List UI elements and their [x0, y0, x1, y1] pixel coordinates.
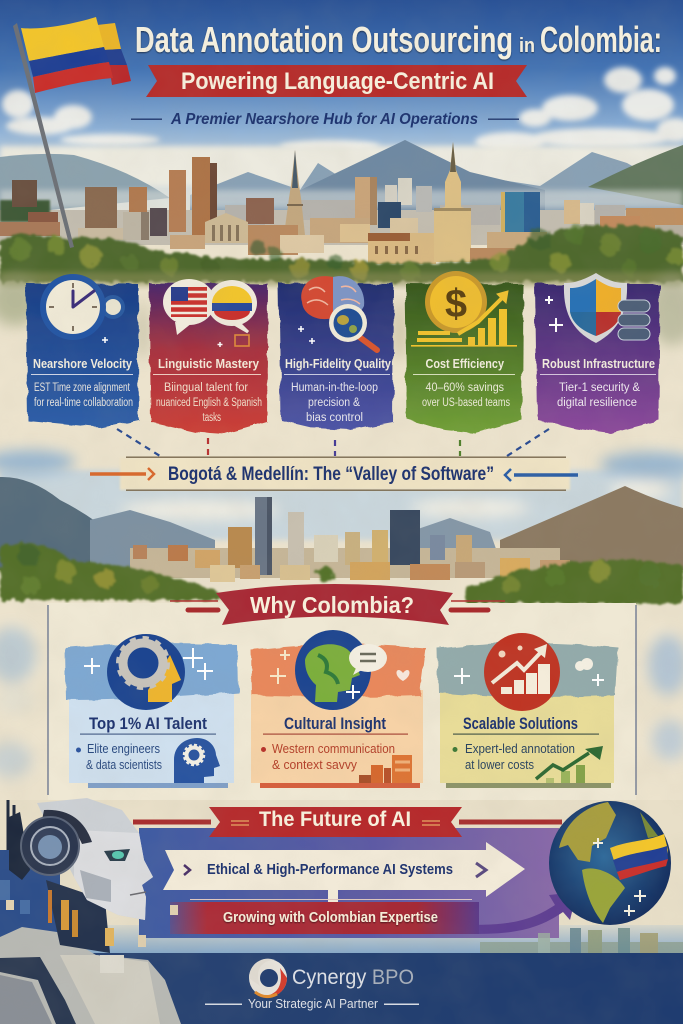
icon: shield and server — [545, 273, 650, 343]
ribbon: The Future of AI: The Future of AI — [259, 808, 411, 831]
arrow: Growing with Colombian Expertise — [170, 892, 577, 934]
head — [37, 798, 153, 920]
body — [0, 927, 181, 1024]
panel: High-Fidelity Quality: precision & — [308, 397, 360, 409]
panel: Robust Infrastructure: digital resilience — [557, 397, 637, 409]
icon: brain and magnifier — [298, 276, 377, 350]
panel: High-Fidelity Quality: Human-in-the-loop — [291, 382, 378, 394]
card: Cultural Insight: Cultural Insight — [284, 714, 386, 733]
icon: speech bubbles with flags — [163, 279, 257, 347]
footer bar — [0, 953, 683, 1024]
ear module — [8, 800, 92, 880]
icon: head with gear — [84, 634, 213, 710]
panel: Linguistic Mastery: tasks — [202, 412, 221, 424]
card: Scalable Solutions: at lower costs — [465, 757, 534, 772]
heading ribbon: Why Colombia?: Why Colombia? — [250, 592, 414, 618]
card: Cultural Insight: Western communication — [272, 741, 395, 756]
header scene: sky, mountains and city — [0, 0, 683, 286]
city buildings — [0, 142, 683, 264]
logo: Cynergy BPO — [205, 959, 419, 1011]
second scene: valley of software skyline — [0, 450, 683, 604]
ribbon: subtitle: Powering Language-Centric AI — [181, 68, 494, 95]
panel: Linguistic Mastery: nuaniced English & Spanish — [156, 397, 262, 409]
tagline: A Premier Nearshore Hub for AI Operations — [170, 111, 478, 128]
panel: Cost Efficiency: over US-based teams — [422, 397, 510, 409]
card: Scalable Solutions: Scalable Solutions — [463, 714, 578, 733]
icon: head with small gear — [174, 738, 220, 783]
card: Top 1% AI Talent: Elite engineers — [87, 741, 160, 756]
card: Top 1% AI Talent: & data scientists — [86, 757, 162, 772]
panel: Linguistic Mastery — [149, 279, 268, 434]
panel: Linguistic Mastery: Linguistic Mastery — [158, 356, 260, 371]
icon: globe with Colombian flag — [549, 801, 671, 925]
icon: logo swirl — [249, 959, 287, 997]
logo: Cynergy BPO: Your Strategic AI Partner — [248, 996, 379, 1011]
icon: coin and growth chart — [411, 271, 517, 347]
icon: clock — [40, 274, 125, 343]
mountains — [0, 140, 683, 215]
panel: Cost Efficiency: 40–60% savings — [426, 382, 504, 394]
arrow: Ethical & High-Performance AI Systems — [163, 842, 525, 902]
icon: growth chart on red circle — [454, 633, 604, 711]
banner: Bogotá & Medellín — [90, 456, 578, 491]
panel: Nearshore Velocity — [26, 274, 139, 428]
panel: Robust Infrastructure: Robust Infrastructure — [542, 356, 655, 371]
panel: Robust Infrastructure: Tier-1 security & — [559, 382, 640, 394]
panel: High-Fidelity Quality: bias control — [306, 412, 363, 424]
arrow: Ethical & High-Performance AI Systems: Ethical & High-Performance AI Systems — [207, 861, 453, 878]
icon: green rising arrow — [536, 746, 603, 783]
arrow: left orange — [90, 468, 154, 480]
icon: coin and growth chart: $ — [445, 282, 467, 326]
icon: Colombian flag on pole — [13, 17, 131, 248]
arrow: Growing with Colombian Expertise: Growing with Colombian Expertise — [223, 910, 438, 926]
panel: Cost Efficiency — [405, 271, 523, 433]
connectors: dashed lines from cards to banner — [117, 429, 549, 456]
panel: Cost Efficiency: Cost Efficiency — [426, 356, 505, 371]
panel: Linguistic Mastery: Biingual talent for — [164, 382, 248, 394]
panel: Robust Infrastructure — [535, 273, 660, 433]
panel: Nearshore Velocity: for real-time collaboration — [34, 397, 133, 409]
banner: Bogotá & Medellín: Bogotá & Medellín: The “Valley of Software” — [168, 464, 494, 485]
logo: Cynergy BPO: Cynergy BPO — [292, 966, 414, 989]
card: Top 1% AI Talent: Top 1% AI Talent — [89, 714, 207, 733]
panel: Nearshore Velocity: Nearshore Velocity — [33, 356, 133, 371]
title: Data Annotation Outsourcing — [135, 19, 513, 60]
ribbon: The Future of AI — [133, 807, 562, 837]
trees — [0, 224, 683, 282]
card: Top 1% AI Talent — [65, 634, 238, 788]
side wash around Why Colombia panel — [0, 627, 683, 778]
panel: Why Colombia — [48, 584, 636, 803]
neck and wires — [46, 880, 114, 953]
panel: Nearshore Velocity: EST Time zone alignment — [34, 382, 131, 394]
icon: orange buildings — [359, 755, 412, 783]
card: Scalable Solutions: Expert-led annotation — [465, 741, 575, 756]
title: in — [519, 35, 535, 57]
icon: globe head and speech bubble — [270, 630, 410, 710]
heading ribbon: Why Colombia? — [170, 584, 505, 625]
future section background band — [0, 800, 683, 955]
skyline blocks lower right — [480, 928, 683, 954]
panel: High-Fidelity Quality — [279, 276, 394, 430]
arrow: right blue — [505, 469, 578, 481]
card: Cultural Insight — [251, 630, 426, 788]
card: Scalable Solutions — [437, 633, 618, 788]
parchment wash behind cards — [0, 274, 683, 360]
illustration: robot — [0, 798, 181, 1024]
panel: High-Fidelity Quality: High-Fidelity Quality — [285, 356, 392, 371]
card: Cultural Insight: & context savvy — [272, 757, 357, 772]
